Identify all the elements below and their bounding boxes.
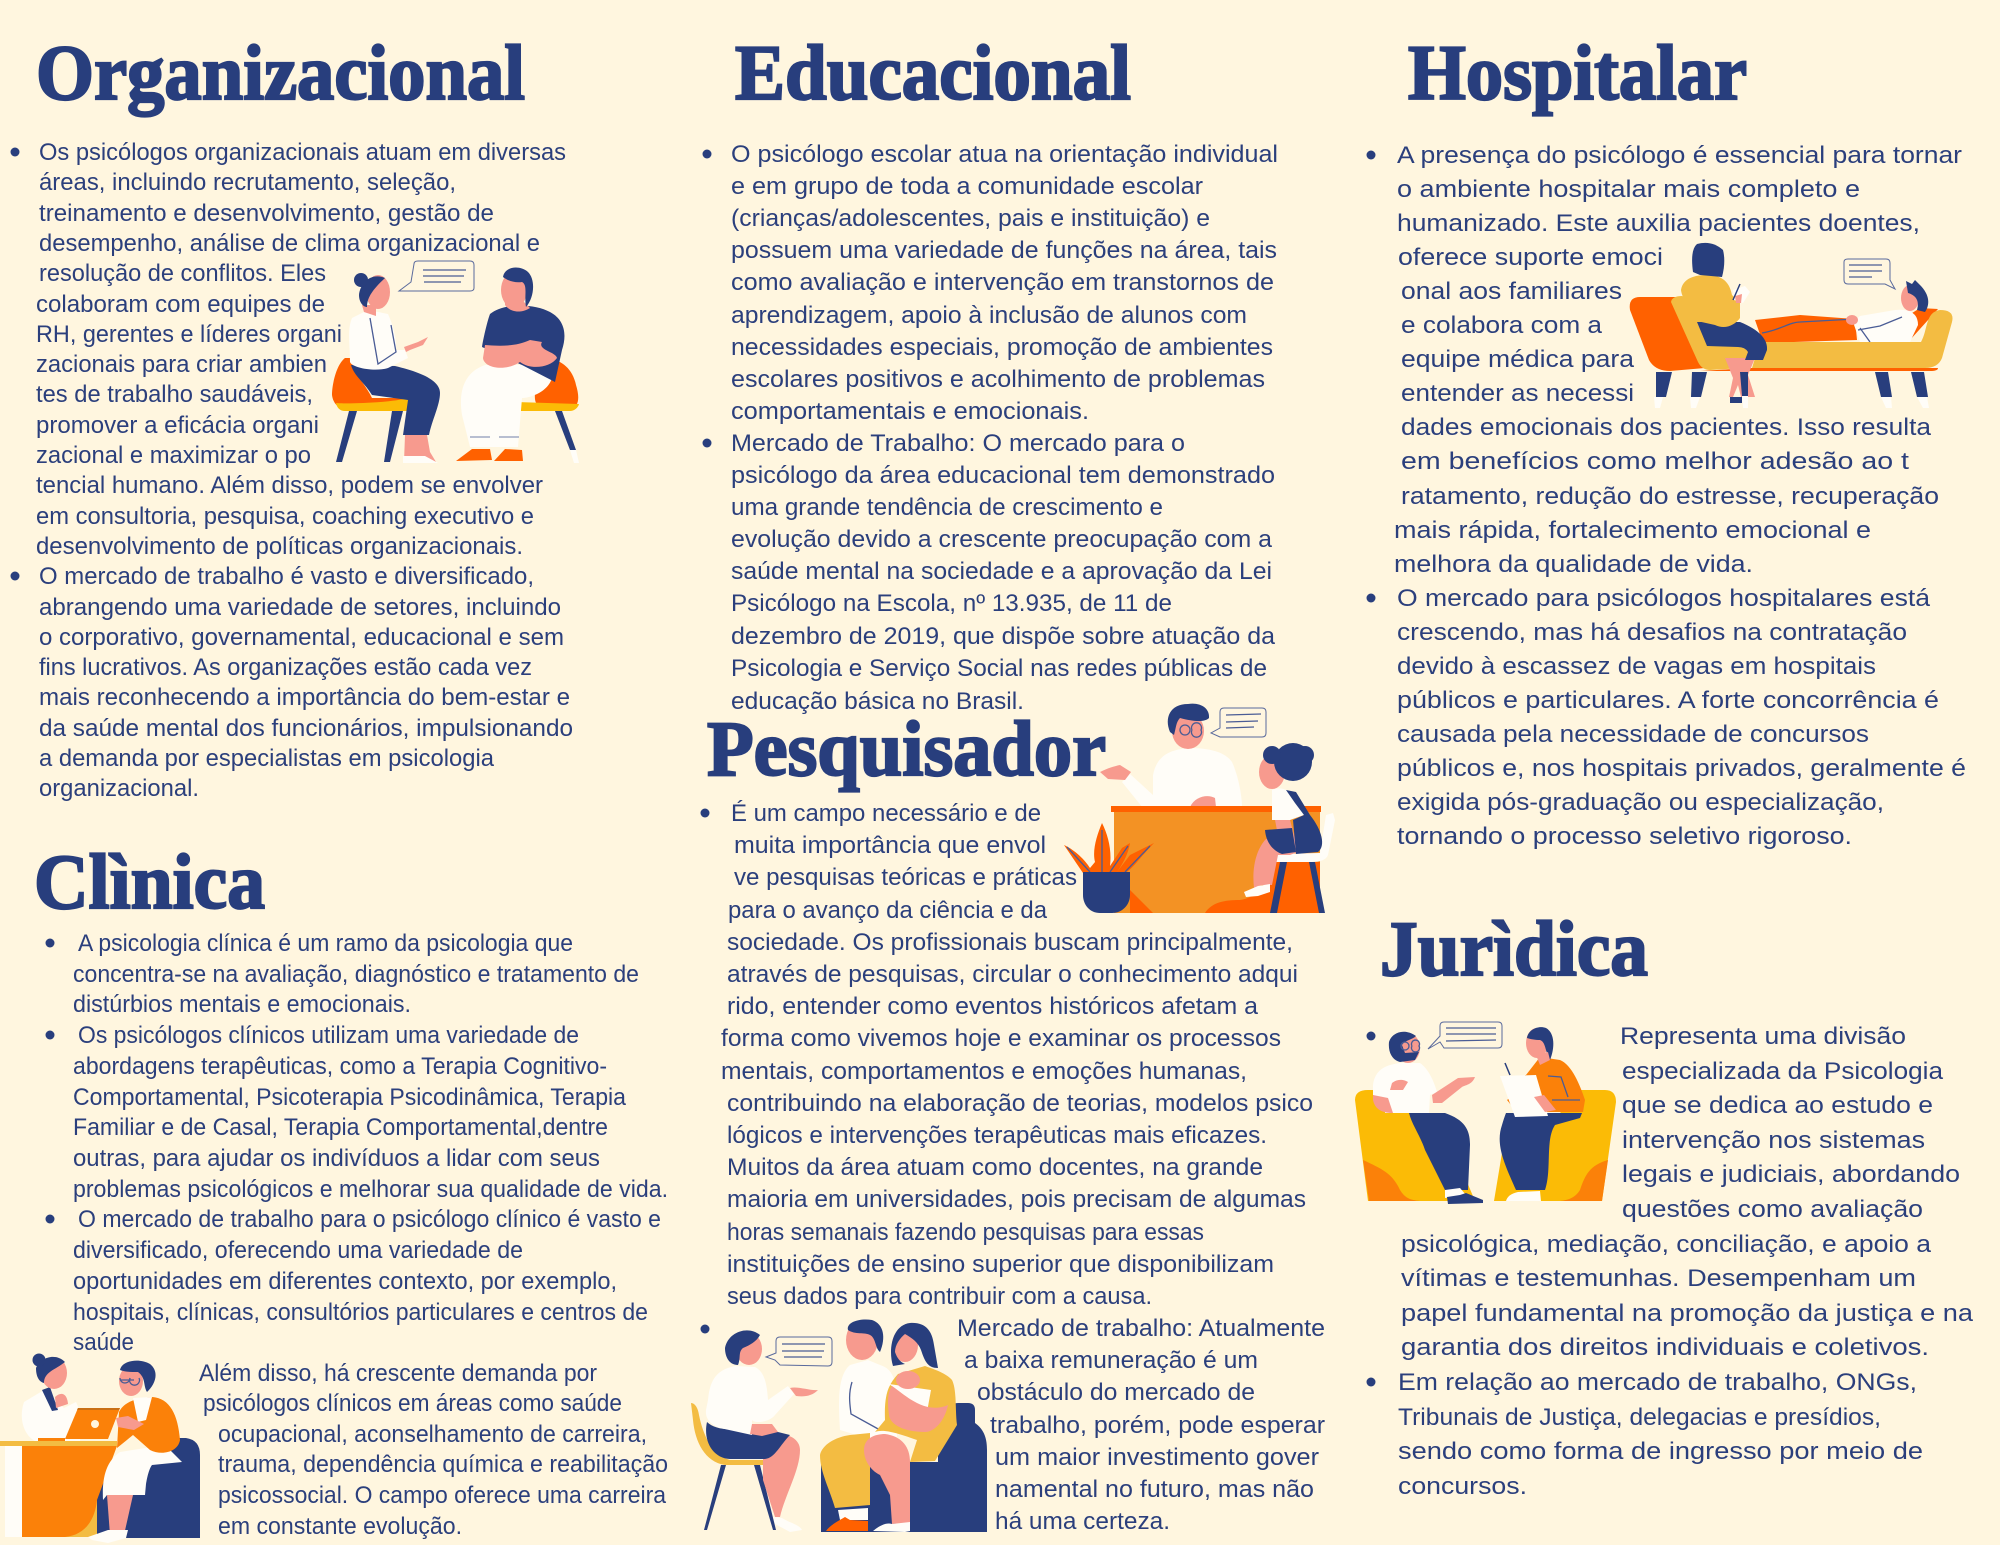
text block: clínica definição: abordagens terapêuticas, como a Terapia Cognitivo- xyxy=(73,1053,607,1080)
text block: educacional atuação: necessidades especiais, promoção de ambientes xyxy=(731,334,1273,361)
text block: hospitalar mercado: crescendo, mas há desafios na contratação xyxy=(1397,619,1907,646)
text block: hospitalar mercado: devido à escassez de vagas em hospitais xyxy=(1397,653,1876,680)
text block: hospitalar mercado: públicos e particulares. A forte concorrência é xyxy=(1397,687,1939,714)
text block: organizacional atuação: promover a eficácia organi xyxy=(36,412,319,439)
panel: Jurídica xyxy=(1355,905,1974,1500)
text block: clínica definição: Comportamental, Psicoterapia Psicodinâmica, Terapia xyxy=(73,1084,627,1111)
text block: organizacional atuação: desempenho, análise de clima organizacional e xyxy=(39,230,540,257)
text block: pesquisador atuação: muita importância que envol xyxy=(734,832,1046,859)
text block: educacional atuação: aprendizagem, apoio à inclusão de alunos com xyxy=(731,302,1247,329)
text block: organizacional mercado: a demanda por especialistas em psicologia xyxy=(39,745,495,772)
text block: educacional atuação: escolares positivos e acolhimento de problemas xyxy=(731,366,1265,393)
panel: Clínica xyxy=(0,838,668,1543)
illustration: two people seated in conversation xyxy=(332,261,579,463)
text block: pesquisador atuação: ve pesquisas teóricas e práticas xyxy=(734,864,1077,891)
text block: clínica definição: problemas psicológicos e melhorar sua qualidade de vida. xyxy=(73,1176,668,1203)
text block: organizacional atuação: zacionais para criar ambien xyxy=(36,351,327,378)
text block: educacional mercado: evolução devido a crescente preocupação com a xyxy=(731,526,1273,553)
text block: clínica demanda: psicólogos clínicos em áreas como saúde xyxy=(203,1390,622,1417)
illustration: two men in armchairs with notes xyxy=(1355,1022,1616,1204)
panel: Educacional xyxy=(702,29,1278,715)
text block: pesquisador atuação: através de pesquisas, circular o conhecimento adqui xyxy=(727,961,1298,988)
text block: clínica demanda xyxy=(199,1360,668,1540)
text block: pesquisador atuação: seus dados para contribuir com a causa. xyxy=(727,1283,1152,1310)
text block: pesquisador mercado: namental no futuro, mas não xyxy=(995,1476,1314,1503)
text block: pesquisador atuação: maioria em universidades, pois precisam de algumas xyxy=(727,1186,1306,1213)
text block: organizacional atuação: tes de trabalho saudáveis, xyxy=(36,381,313,408)
text block: hospitalar mercado: causada pela necessidade de concursos xyxy=(1397,721,1869,748)
heading: Organizacional: Organizacional xyxy=(36,29,525,116)
text block: organizacional atuação: Os psicólogos organizacionais atuam em diversas xyxy=(39,139,566,166)
heading: Clìnica: Clìnica xyxy=(34,838,265,925)
text block: pesquisador atuação xyxy=(700,800,1313,1310)
text block: jurídica mercado: sendo como forma de ingresso por meio de xyxy=(1398,1438,1923,1465)
text block: jurídica definição: psicológica, mediação, conciliação, e apoio a xyxy=(1401,1231,1932,1258)
text block: clínica demanda: em constante evolução. xyxy=(218,1513,462,1540)
text block: educacional mercado: psicólogo da área educacional tem demonstrado xyxy=(731,462,1275,489)
text block: jurídica mercado xyxy=(1366,1369,1923,1500)
text block: hospitalar mercado: O mercado para psicólogos hospitalares está xyxy=(1397,585,1931,612)
text block: hospitalar mercado: públicos e, nos hospitais privados, geralmente é xyxy=(1397,755,1966,782)
illustration: clinical consultation at desk xyxy=(0,1354,200,1543)
text block: jurídica definição: Representa uma divisão xyxy=(1620,1023,1906,1050)
text block: pesquisador atuação: sociedade. Os profissionais buscam principalmente, xyxy=(727,929,1293,956)
text block: educacional atuação: (crianças/adolescentes, pais e instituição) e xyxy=(731,205,1210,232)
text block: pesquisador atuação: horas semanais fazendo pesquisas para essas xyxy=(727,1219,1204,1246)
text block: hospitalar atuação: onal aos familiares xyxy=(1401,278,1622,305)
panel: Hospitalar xyxy=(1366,29,1966,850)
text block: clínica demanda: ocupacional, aconselhamento de carreira, xyxy=(218,1421,647,1448)
text block: jurídica mercado: Tribunais de Justiça, delegacias e presídios, xyxy=(1398,1404,1881,1431)
text block: clínica definição: diversificado, oferecendo uma variedade de xyxy=(73,1237,523,1264)
text block: clínica definição: Familiar e de Casal, Terapia Comportamental,dentre xyxy=(73,1114,608,1141)
text block: pesquisador atuação: É um campo necessário e de xyxy=(731,800,1041,827)
text block: organizacional mercado: da saúde mental dos funcionários, impulsionando xyxy=(39,715,573,742)
text block: pesquisador mercado: trabalho, porém, pode esperar xyxy=(990,1412,1325,1439)
text block: educacional atuação: O psicólogo escolar atua na orientação individual xyxy=(731,141,1278,168)
text block: educacional mercado: uma grande tendência de crescimento e xyxy=(731,494,1163,521)
text block: educacional atuação: como avaliação e intervenção em transtornos de xyxy=(731,269,1274,296)
text block: jurídica mercado: concursos. xyxy=(1398,1473,1527,1500)
text block: educacional mercado: Psicólogo na Escola, nº 13.935, de 11 de xyxy=(731,590,1172,617)
text block: organizacional atuação xyxy=(10,139,566,560)
text block: educacional atuação: possuem uma variedade de funções na área, tais xyxy=(731,237,1277,264)
text block: organizacional mercado: organizacional. xyxy=(39,775,199,802)
text block: pesquisador atuação: forma como vivemos hoje e examinar os processos xyxy=(721,1025,1281,1052)
text block: clínica demanda: psicossocial. O campo oferece uma carreira xyxy=(218,1482,667,1509)
text block: jurídica definição: legais e judiciais, abordando xyxy=(1622,1161,1960,1188)
panel: Organizacional xyxy=(10,29,579,802)
text block: educacional mercado: Mercado de Trabalho: O mercado para o xyxy=(731,430,1185,457)
text block: organizacional atuação: colaboram com equipes de xyxy=(36,291,325,318)
text block: hospitalar atuação: dades emocionais dos pacientes. Isso resulta xyxy=(1401,414,1932,441)
text block: pesquisador mercado xyxy=(700,1315,1325,1535)
text block: pesquisador atuação: lógicos e intervenções terapêuticas mais eficazes. xyxy=(727,1122,1267,1149)
text block: clínica definição xyxy=(46,930,668,1356)
text block: organizacional mercado xyxy=(10,563,573,802)
text block: clínica definição: concentra-se na avaliação, diagnóstico e tratamento de xyxy=(73,961,639,988)
text block: clínica definição: O mercado de trabalho para o psicólogo clínico é vasto e xyxy=(78,1206,661,1233)
text block: pesquisador atuação: Muitos da área atuam como docentes, na grande xyxy=(727,1154,1263,1181)
text block: organizacional atuação: treinamento e desenvolvimento, gestão de xyxy=(39,200,494,227)
text block: hospitalar atuação: A presença do psicólogo é essencial para tornar xyxy=(1397,142,1962,169)
text block: pesquisador mercado: um maior investimento gover xyxy=(995,1444,1319,1471)
illustration: teacher and student at desk with plant xyxy=(1064,704,1335,913)
text block: jurídica definição: especializada da Psicologia xyxy=(1622,1058,1944,1085)
text block: organizacional atuação: resolução de conflitos. Eles xyxy=(39,260,326,287)
text block: hospitalar mercado: exigida pós-graduação ou especialização, xyxy=(1397,789,1884,816)
heading: Educacional: Educacional xyxy=(735,29,1131,116)
text block: educacional atuação: e em grupo de toda a comunidade escolar xyxy=(731,173,1203,200)
illustration: therapist with patient on couch xyxy=(1630,243,1952,408)
text block: jurídica definição: papel fundamental na promoção da justiça e na xyxy=(1401,1300,1974,1327)
heading: Jurìdica: Jurìdica xyxy=(1380,905,1648,992)
text block: organizacional atuação: zacional e maximizar o po xyxy=(36,442,311,469)
text block: jurídica definição xyxy=(1366,1023,1974,1361)
text block: organizacional mercado: fins lucrativos. As organizações estão cada vez xyxy=(39,654,532,681)
text block: pesquisador mercado: há uma certeza. xyxy=(995,1508,1170,1535)
text block: hospitalar mercado: tornando o processo seletivo rigoroso. xyxy=(1397,823,1852,850)
text block: pesquisador mercado: a baixa remuneração é um xyxy=(964,1347,1258,1374)
text block: clínica definição: oportunidades em diferentes contexto, por exemplo, xyxy=(73,1268,617,1295)
text block: educacional mercado: saúde mental na sociedade e a aprovação da Lei xyxy=(731,558,1272,585)
text block: organizacional atuação: desenvolvimento de políticas organizacionais. xyxy=(36,533,523,560)
text block: hospitalar atuação: o ambiente hospitalar mais completo e xyxy=(1397,176,1860,203)
text block: educacional mercado: educação básica no Brasil. xyxy=(731,688,1024,715)
text block: clínica definição: saúde xyxy=(73,1329,134,1356)
text block: hospitalar atuação: e colabora com a xyxy=(1401,312,1603,339)
text block: pesquisador atuação: mentais, comportamentos e emoções humanas, xyxy=(721,1058,1247,1085)
text block: clínica definição: distúrbios mentais e emocionais. xyxy=(73,991,411,1018)
text block: hospitalar atuação: entender as necessi xyxy=(1401,380,1634,407)
heading: Hospitalar: Hospitalar xyxy=(1408,29,1747,116)
text block: organizacional mercado: O mercado de trabalho é vasto e diversificado, xyxy=(39,563,534,590)
text block: organizacional atuação: RH, gerentes e líderes organi xyxy=(36,321,342,348)
text block: hospitalar atuação: mais rápida, fortalecimento emocional e xyxy=(1394,517,1871,544)
heading: Pesquisador: Pesquisador xyxy=(707,705,1106,792)
text block: clínica definição: A psicologia clínica é um ramo da psicologia que xyxy=(78,930,573,957)
text block: hospitalar atuação xyxy=(1366,142,1962,578)
text block: educacional mercado: dezembro de 2019, que dispõe sobre atuação da xyxy=(731,623,1276,650)
text block: jurídica definição: garantia dos direitos individuais e coletivos. xyxy=(1401,1334,1929,1361)
text block: jurídica mercado: Em relação ao mercado de trabalho, ONGs, xyxy=(1398,1369,1917,1396)
text block: hospitalar atuação: equipe médica para xyxy=(1401,346,1635,373)
text block: hospitalar atuação: melhora da qualidade de vida. xyxy=(1394,551,1753,578)
text block: hospitalar mercado xyxy=(1366,585,1966,850)
text block: pesquisador atuação: rido, entender como eventos históricos afetam a xyxy=(727,993,1259,1020)
text block: pesquisador mercado: obstáculo do mercado de xyxy=(977,1379,1255,1406)
text block: jurídica definição: vítimas e testemunhas. Desempenham um xyxy=(1401,1265,1916,1292)
text block: hospitalar atuação: oferece suporte emoci xyxy=(1398,244,1663,271)
text block: organizacional mercado: mais reconhecendo a importância do bem-estar e xyxy=(39,684,570,711)
text block: hospitalar atuação: em benefícios como melhor adesão ao t xyxy=(1401,448,1909,475)
text block: pesquisador mercado: Mercado de trabalho: Atualmente xyxy=(957,1315,1325,1342)
text block: organizacional mercado: abrangendo uma variedade de setores, incluindo xyxy=(39,594,561,621)
text block: educacional atuação xyxy=(702,141,1278,425)
text block: pesquisador atuação: instituições de ensino superior que disponibilizam xyxy=(727,1251,1274,1278)
illustration: counselor with family and baby xyxy=(691,1319,987,1532)
text block: educacional mercado: Psicologia e Serviço Social nas redes públicas de xyxy=(731,655,1267,682)
text block: hospitalar atuação: ratamento, redução do estresse, recuperação xyxy=(1401,483,1939,510)
text block: educacional atuação: comportamentais e emocionais. xyxy=(731,398,1089,425)
text block: organizacional mercado: o corporativo, governamental, educacional e sem xyxy=(39,624,564,651)
text block: educacional mercado xyxy=(702,430,1276,715)
text block: organizacional atuação: em consultoria, pesquisa, coaching executivo e xyxy=(36,503,534,530)
text block: clínica demanda: Além disso, há crescente demanda por xyxy=(199,1360,597,1387)
text block: jurídica definição: intervenção nos sistemas xyxy=(1622,1127,1925,1154)
text block: organizacional atuação: áreas, incluindo recrutamento, seleção, xyxy=(39,169,456,196)
text block: jurídica definição: que se dedica ao estudo e xyxy=(1622,1092,1933,1119)
text block: pesquisador atuação: para o avanço da ciência e da xyxy=(728,897,1048,924)
text block: clínica definição: hospitais, clínicas, consultórios particulares e centros de xyxy=(73,1299,648,1326)
panel: Pesquisador xyxy=(691,704,1335,1535)
text block: hospitalar atuação: humanizado. Este auxilia pacientes doentes, xyxy=(1397,210,1920,237)
text block: organizacional atuação: tencial humano. Além disso, podem se envolver xyxy=(36,472,543,499)
text block: clínica demanda: trauma, dependência química e reabilitação xyxy=(218,1451,668,1478)
text block: clínica definição: outras, para ajudar os indivíduos a lidar com seus xyxy=(73,1145,600,1172)
text block: pesquisador atuação: contribuindo na elaboração de teorias, modelos psico xyxy=(727,1090,1313,1117)
text block: jurídica definição: questões como avaliação xyxy=(1622,1196,1923,1223)
text block: clínica definição: Os psicólogos clínicos utilizam uma variedade de xyxy=(78,1022,579,1049)
